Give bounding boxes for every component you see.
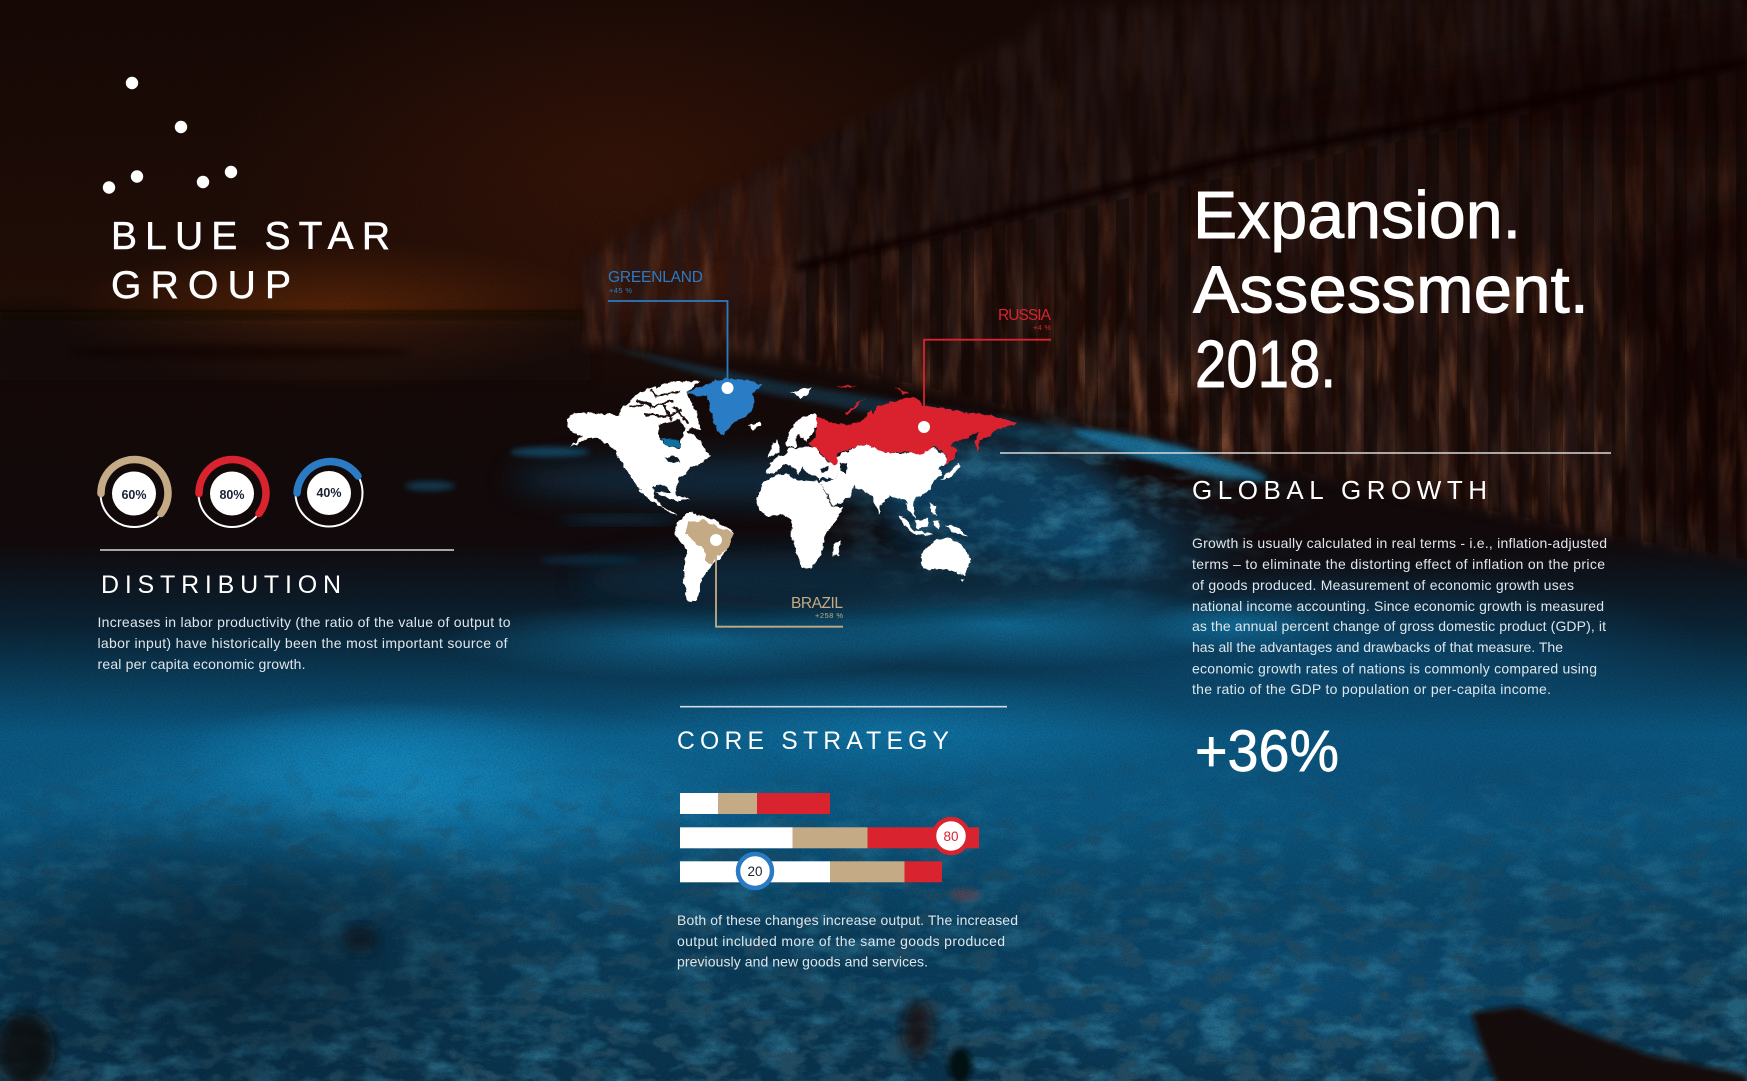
text block: global growth: of goods produced. Measurement of economic growth uses bbox=[1192, 577, 1574, 593]
map: Russia highlight bbox=[808, 385, 1017, 465]
logo wordmark: BLUE STAR bbox=[111, 215, 390, 258]
callout: Russia: RUSSIA bbox=[998, 307, 1052, 324]
logo wordmark: GROUP bbox=[111, 264, 291, 307]
text block: distribution: labor input) have historically been the most important source of bbox=[98, 635, 508, 651]
marker: 80 bbox=[934, 819, 968, 853]
glow line on shore bbox=[600, 345, 1230, 470]
callout: Greenland: +45 % bbox=[609, 286, 632, 295]
callout: Russia bbox=[918, 307, 1052, 433]
bar 2 bbox=[680, 827, 979, 848]
title bbox=[1193, 178, 1589, 402]
world map bbox=[567, 378, 1017, 602]
callout: Greenland: GREENLAND bbox=[608, 269, 703, 286]
text block: global growth: the ratio of the GDP to population or per-capita income. bbox=[1192, 681, 1551, 697]
marker: 80: 80 bbox=[943, 829, 959, 844]
title: Expansion. bbox=[1193, 178, 1521, 253]
text block: distribution: real per capita economic growth. bbox=[98, 656, 306, 672]
heading: global growth: GLOBAL GROWTH bbox=[1192, 475, 1487, 505]
ring gauge: 80% bbox=[198, 460, 266, 527]
ring gauge: 80%: 80% bbox=[219, 488, 245, 502]
text block: core strategy: output included more of the same goods produced bbox=[677, 933, 1005, 949]
map: Brazil highlight bbox=[685, 520, 734, 565]
text block: global growth: terms – to eliminate the distorting effect of inflation on the price bbox=[1192, 556, 1605, 572]
callout: Brazil: BRAZIL bbox=[791, 595, 843, 612]
map continents in white bbox=[567, 381, 972, 602]
big stat: +36%: +36% bbox=[1195, 719, 1339, 784]
ring gauges: distribution bbox=[100, 460, 362, 527]
text block: core strategy: previously and new goods and services. bbox=[677, 954, 928, 970]
text block: core strategy: Both of these changes increase output. The increased bbox=[677, 912, 1018, 928]
bar 1 bbox=[680, 793, 830, 814]
title: Assessment. bbox=[1193, 252, 1589, 328]
text block: global growth: as the annual percent change of gross domestic product (GDP), it bbox=[1192, 618, 1606, 634]
heading: distribution: DISTRIBUTION bbox=[101, 571, 341, 599]
heading: core strategy: CORE STRATEGY bbox=[677, 728, 949, 755]
text block: global growth: national income accounting. Since economic growth is measured bbox=[1192, 598, 1604, 614]
map: Greenland highlight bbox=[687, 378, 763, 435]
text block: global growth: has all the advantages and drawbacks of that measure. The bbox=[1192, 639, 1563, 655]
text block: global growth: Growth is usually calculated in real terms - i.e., inflation-adjusted bbox=[1192, 535, 1607, 551]
title: 2018. bbox=[1195, 327, 1336, 402]
callout: Brazil: +258 % bbox=[815, 611, 843, 620]
text block: global growth bbox=[1192, 535, 1607, 697]
marker: 20 bbox=[738, 854, 772, 888]
logo wordmark bbox=[111, 215, 390, 307]
callout: Greenland bbox=[608, 269, 734, 394]
bar 3 bbox=[680, 861, 942, 882]
marker: 20: 20 bbox=[747, 864, 763, 879]
text block: global growth: economic growth rates of nations is commonly compared using bbox=[1192, 660, 1597, 676]
text block: core strategy bbox=[677, 912, 1018, 970]
text block: distribution: Increases in labor productivity (the ratio of the value of output to bbox=[98, 614, 511, 630]
ring gauge: 60%: 60% bbox=[121, 488, 147, 502]
callout: Russia: +4 % bbox=[1033, 323, 1051, 332]
logo: constellation dots bbox=[103, 77, 237, 194]
callout: Brazil bbox=[710, 534, 843, 627]
ring gauge: 60% bbox=[100, 460, 168, 527]
stacked bar chart: core strategy bbox=[680, 793, 979, 888]
ring gauge: 40% bbox=[296, 460, 362, 526]
text block: distribution bbox=[98, 614, 511, 672]
ring gauge: 40%: 40% bbox=[316, 486, 342, 500]
